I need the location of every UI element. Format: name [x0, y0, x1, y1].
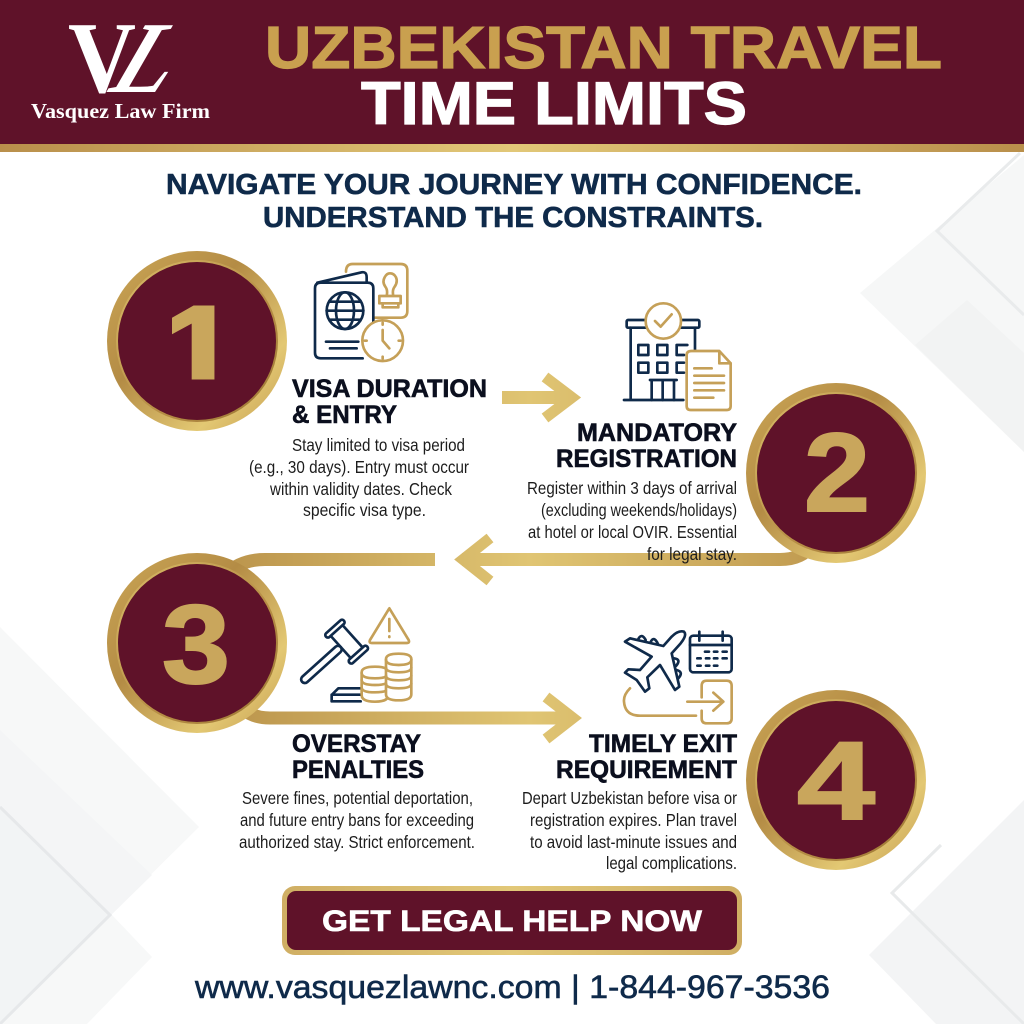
- heading: visa duration: VISA DURATION: [292, 375, 487, 403]
- body: visa duration: Stay limited to visa period: [292, 435, 465, 455]
- icon: gavel, warning and coins: [289, 608, 411, 702]
- arrow: step 1 to step 2: [502, 377, 572, 418]
- footer contact line: www.vasquezlawnc.com | 1-844-967-3536: [194, 969, 830, 1005]
- step 4 badge: [746, 690, 926, 870]
- arrow: step 2 to step 3: [225, 538, 812, 581]
- subtitle: [166, 169, 862, 234]
- heading: mandatory registration: [556, 419, 737, 473]
- arrow: step 3 to step 4: [236, 697, 573, 739]
- step 2 badge: [746, 383, 926, 563]
- body: visa duration: (e.g., 30 days). Entry must occur: [249, 457, 469, 477]
- step 4 badge: 4: [797, 719, 875, 843]
- logo: Vasquez Law Firm: [31, 1, 212, 123]
- heading: mandatory registration: MANDATORY: [577, 419, 737, 447]
- logo: Vasquez Law Firm: Vasquez Law Firm: [31, 99, 211, 123]
- heading: overstay penalties: PENALTIES: [292, 756, 424, 784]
- heading: timely exit requirement: [556, 730, 737, 784]
- body: mandatory registration: [527, 478, 737, 564]
- panel: step 4 text: [522, 730, 737, 873]
- heading: timely exit requirement: REQUIREMENT: [556, 756, 737, 784]
- panel: step 3 text: [239, 730, 475, 852]
- body: overstay penalties: Severe fines, potential deportation,: [242, 788, 473, 808]
- body: timely exit requirement: to avoid last-minute issues and: [530, 832, 737, 852]
- step 1 badge: 1: [158, 278, 241, 424]
- title: UZBEKISTAN TRAVEL: [265, 15, 942, 81]
- step 3 badge: [107, 553, 287, 733]
- icon: plane, calendar and exit: [624, 631, 732, 723]
- heading: visa duration: [292, 375, 487, 429]
- body: overstay penalties: authorized stay. Strict enforcement.: [239, 832, 475, 852]
- icon: hotel registration and document: [624, 303, 731, 410]
- body: mandatory registration: at hotel or local OVIR. Essential: [528, 522, 737, 542]
- subtitle: UNDERSTAND THE CONSTRAINTS.: [263, 202, 763, 234]
- call to action button: GET LEGAL HELP NOW: [322, 905, 703, 938]
- step 2 badge: 2: [804, 411, 870, 535]
- body: mandatory registration: (excluding weekends/holidays): [541, 500, 737, 520]
- heading: timely exit requirement: TIMELY EXIT: [589, 730, 737, 758]
- call to action button: [282, 886, 742, 955]
- body: visa duration: specific visa type.: [303, 500, 426, 520]
- subtitle: NAVIGATE YOUR JOURNEY WITH CONFIDENCE.: [166, 169, 862, 201]
- logo: Vasquez Law Firm: V: [68, 2, 136, 115]
- body: timely exit requirement: [522, 788, 737, 873]
- panel: step 1 text: [249, 375, 487, 520]
- step 1 badge: [107, 251, 287, 431]
- body: timely exit requirement: legal complications.: [606, 853, 737, 873]
- body: timely exit requirement: registration expires. Plan travel: [530, 810, 737, 830]
- panel: step 2 text: [527, 419, 737, 564]
- body: timely exit requirement: Depart Uzbekistan before visa or: [522, 788, 737, 808]
- title: [265, 15, 942, 137]
- icon: passport, stamp and clock: [315, 264, 407, 361]
- body: mandatory registration: Register within 3 days of arrival: [527, 478, 737, 498]
- body: visa duration: [249, 435, 469, 520]
- heading: overstay penalties: [292, 730, 424, 784]
- heading: mandatory registration: REGISTRATION: [556, 445, 737, 473]
- heading: visa duration: & ENTRY: [292, 401, 397, 429]
- header banner: [0, 0, 1024, 152]
- body: mandatory registration: for legal stay.: [647, 544, 737, 564]
- step 3 badge: 3: [162, 583, 230, 707]
- title: TIME LIMITS: [361, 70, 747, 137]
- body: overstay penalties: [239, 788, 475, 852]
- body: overstay penalties: and future entry bans for exceeding: [240, 810, 474, 830]
- logo: Vasquez Law Firm: L: [92, 1, 212, 114]
- heading: overstay penalties: OVERSTAY: [292, 730, 421, 758]
- body: visa duration: within validity dates. Check: [269, 479, 452, 499]
